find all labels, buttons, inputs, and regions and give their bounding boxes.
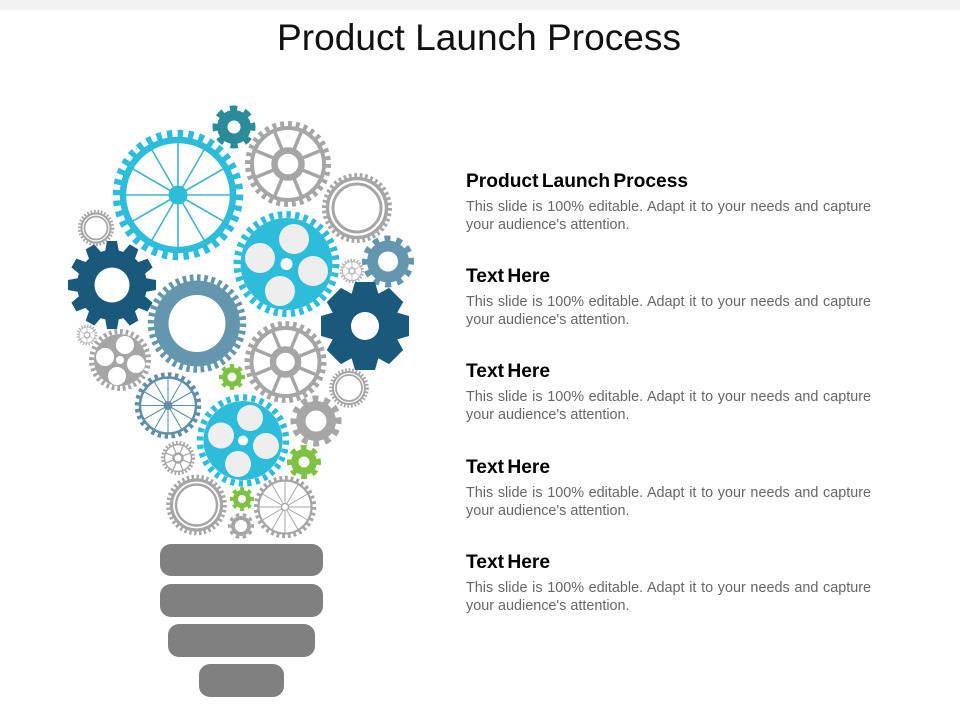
gear: gray twelve teeth (294, 398, 338, 444)
gear: gray ring right (324, 176, 390, 240)
text block 1: This slide is 100% editable. Adapt it to your needs and capture your audience's attention. (466, 199, 871, 233)
gear: small teal (216, 108, 252, 146)
gear: small gray ring left (80, 212, 112, 244)
gear: dark blue eight teeth (321, 282, 409, 370)
gear: gray spoked middle (248, 324, 324, 400)
gear: large slate (151, 278, 243, 370)
title: Product Launch Process (277, 16, 681, 58)
gear: gray four holes (92, 332, 148, 388)
gear: green bottom (232, 489, 252, 509)
text block 4: Text Here (466, 457, 550, 478)
text block 5: Text Here (466, 552, 550, 573)
gear: gray spoked top (248, 124, 328, 204)
bulb base bar 4 (199, 664, 284, 697)
text block 1 (466, 171, 871, 233)
text block 3: Text Here (466, 361, 550, 382)
text block 2: Text Here (466, 266, 550, 287)
bulb base bar 2 (160, 584, 323, 617)
gear: tiny gray spoked lower (162, 442, 194, 474)
text block 2 (466, 266, 871, 328)
gear: green right (290, 448, 318, 476)
gear: gray thin spoked bottom (256, 478, 314, 536)
gear: green top (221, 366, 243, 388)
gear: large cyan spoked (117, 134, 239, 256)
text block 1: Product Launch Process (466, 171, 688, 192)
bulb base bar 1 (160, 544, 323, 576)
text block 5 (466, 552, 871, 614)
gear: slate small right (365, 238, 411, 284)
text block 3: This slide is 100% editable. Adapt it to your needs and capture your audience's attention. (466, 389, 871, 423)
gear: dark blue twelve teeth (68, 241, 156, 329)
text block 4: This slide is 100% editable. Adapt it to your needs and capture your audience's attention. (466, 485, 871, 519)
gear: tiny gray left (78, 326, 96, 344)
gear: tiny gray spoked right (341, 260, 363, 282)
text block 5: This slide is 100% editable. Adapt it to your needs and capture your audience's attention. (466, 580, 871, 614)
gear: slate spoked (137, 374, 199, 436)
gear: gray ring bottom (168, 477, 224, 533)
gear: large cyan four holes (237, 214, 336, 314)
bulb base (160, 544, 323, 697)
text block 4 (466, 457, 871, 519)
bulb base bar 3 (168, 624, 315, 657)
text block 2: This slide is 100% editable. Adapt it to your needs and capture your audience's attention. (466, 294, 871, 328)
text block 3 (466, 361, 871, 423)
gear: gray ring lower right (331, 370, 367, 406)
gear: lower cyan four holes (200, 398, 286, 484)
gear: small gray bottom (230, 514, 252, 538)
